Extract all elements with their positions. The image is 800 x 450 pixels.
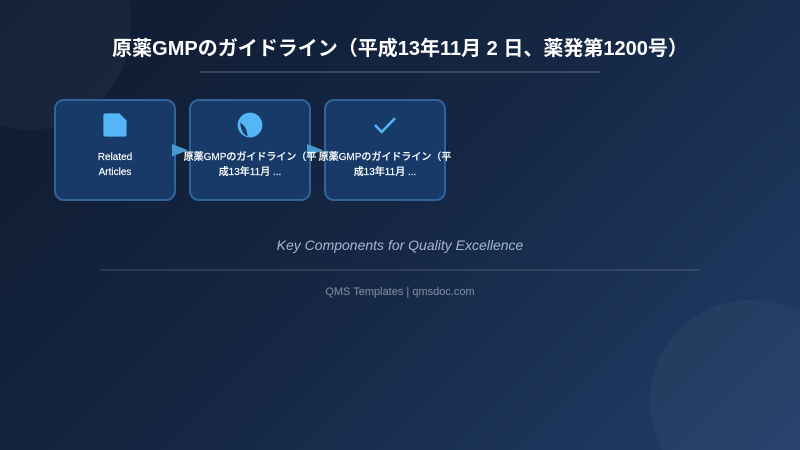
label: Related Articles bbox=[98, 152, 132, 178]
label: guideline 2 bbox=[318, 151, 451, 178]
card: guideline 1 bbox=[189, 99, 311, 201]
subtitle: Key Components for Quality Excellence bbox=[277, 237, 523, 253]
icon: check mark bbox=[374, 117, 396, 134]
label: guideline 2: 成13年11月 ... bbox=[354, 166, 416, 178]
label: Related Articles: Articles bbox=[99, 166, 131, 178]
arrow: 1 to 2 bbox=[172, 144, 188, 156]
icon: circle with leaf bbox=[238, 112, 262, 138]
label: guideline 2: 原薬GMPのガイドライン（平 bbox=[319, 152, 451, 162]
card: Related Articles bbox=[54, 99, 176, 201]
label: guideline 1 bbox=[184, 151, 316, 178]
title: 原薬GMPのガイドライン（平成13年11月 2 日、薬発第1200号） bbox=[112, 38, 688, 60]
arrow: 2 to 3 bbox=[307, 144, 323, 156]
label: guideline 1: 成13年11月 ... bbox=[219, 166, 281, 178]
card: guideline 2 bbox=[324, 99, 446, 201]
footer: QMS Templates | qmsdoc.com bbox=[325, 286, 475, 298]
label: guideline 1: 原薬GMPのガイドライン（平 bbox=[184, 152, 316, 162]
label: Related Articles: Related bbox=[98, 152, 132, 162]
icon: document bbox=[103, 113, 127, 137]
